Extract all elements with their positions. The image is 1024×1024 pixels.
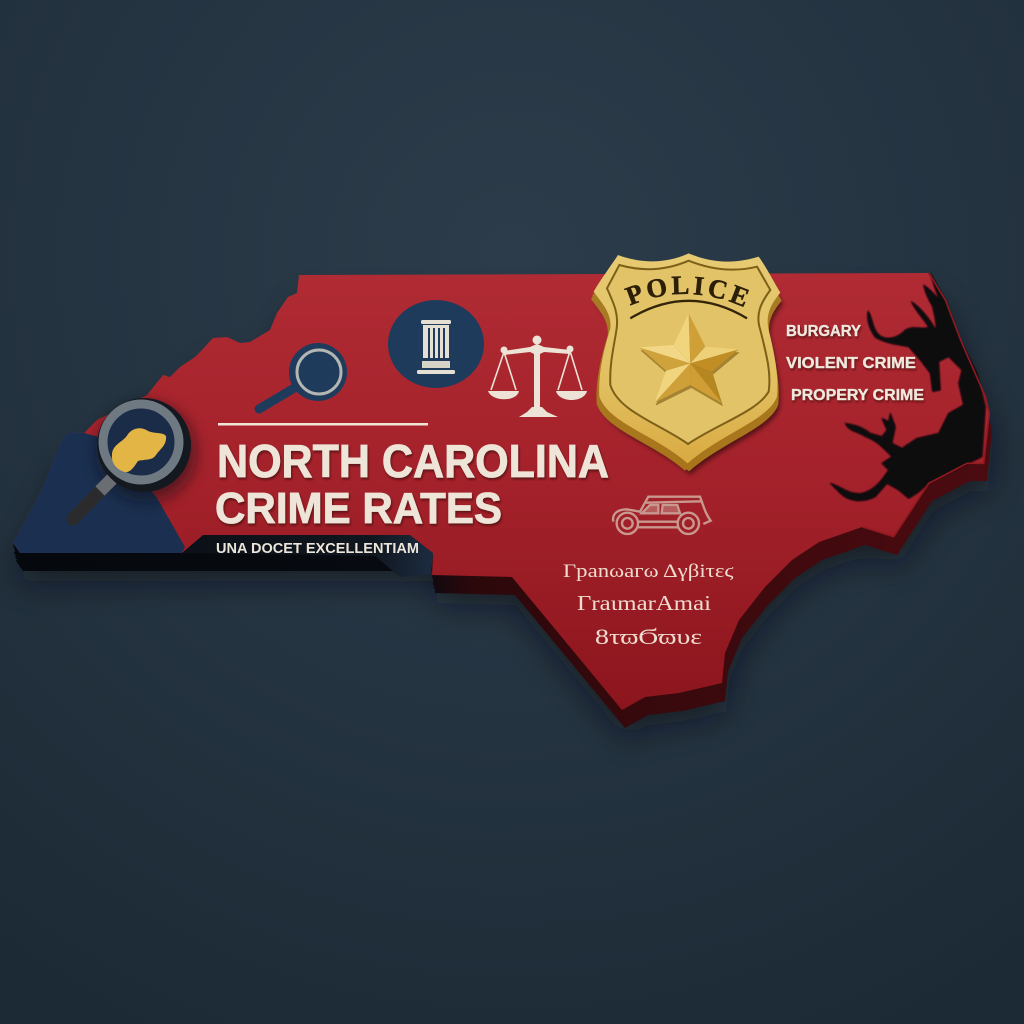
western navy region <box>13 432 185 553</box>
icon: large magnifying glass <box>73 398 196 519</box>
crime labels <box>786 323 924 404</box>
gold state <box>112 428 166 472</box>
map of North Carolina <box>13 273 992 728</box>
arc under POLICE <box>630 301 747 318</box>
handle <box>73 491 100 519</box>
garbled serif labels: 8τϖϬϖυε <box>595 624 702 649</box>
badge side <box>591 257 782 471</box>
icon: scales of justice <box>488 336 587 417</box>
subtitle band <box>182 535 433 577</box>
crime labels: BURGARY <box>786 323 862 340</box>
sounds and coastline <box>830 273 989 537</box>
garbled serif labels: Γpanωaгω Δγβiτεϛ <box>563 561 734 582</box>
crime labels: VIOLENT CRIME <box>786 355 916 372</box>
icon: car <box>613 497 711 534</box>
title: NORTH CAROLINA <box>217 435 609 487</box>
POLICE text <box>629 294 747 309</box>
map shadow <box>17 301 993 738</box>
title <box>215 435 609 533</box>
star <box>639 313 740 406</box>
crime labels: PROPERY CRIME <box>791 387 924 404</box>
police badge <box>591 253 785 476</box>
title: CRIME RATES <box>215 484 502 533</box>
icon: small magnifying glass <box>259 343 347 409</box>
subtitle: UNA DOCET EXCELLENTIAM <box>216 541 419 557</box>
title rule <box>218 423 428 426</box>
badge face <box>594 253 780 463</box>
badge inner panel <box>607 261 770 444</box>
police badge: POLICE <box>624 276 749 307</box>
icon: courthouse column <box>388 300 484 388</box>
garbled serif labels: ΓraιmarAmai <box>577 591 711 615</box>
garbled serif labels <box>563 561 734 649</box>
